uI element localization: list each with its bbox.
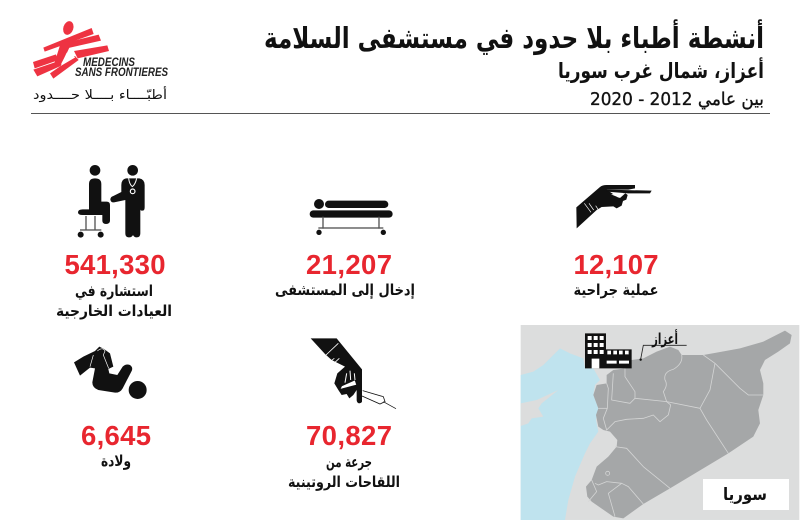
Syria territory bbox=[586, 331, 792, 518]
map label box bbox=[703, 479, 789, 510]
number: 21,207 bbox=[306, 249, 392, 280]
stat: births bbox=[74, 347, 151, 470]
logo Arabic name: أطبّــــاء بــــلا حــــدود bbox=[33, 86, 167, 103]
number: 12,107 bbox=[574, 249, 658, 280]
logo wordmark: SANS FRONTIERES bbox=[75, 65, 168, 79]
label bbox=[56, 282, 172, 320]
label: العيادات الخارجية bbox=[56, 302, 172, 320]
number: 70,827 bbox=[306, 420, 392, 451]
governorate borders bbox=[588, 355, 763, 517]
stat: admissions bbox=[275, 199, 415, 299]
label: عملية جراحية bbox=[574, 281, 658, 299]
number: 541,330 bbox=[64, 249, 166, 280]
map: Syria bbox=[521, 325, 799, 520]
label: استشارة في bbox=[75, 282, 153, 300]
logo wordmark bbox=[75, 55, 168, 79]
label: جرعة من bbox=[326, 453, 372, 471]
icon: hand with syringe bbox=[311, 338, 396, 409]
label bbox=[288, 453, 400, 491]
label: إدخال إلى المستشفى bbox=[275, 281, 415, 299]
number: 6,645 bbox=[81, 420, 151, 451]
logo wordmark: MEDECINS bbox=[83, 55, 135, 69]
icon: newborn held by hand bbox=[74, 347, 147, 399]
icon: hand with scalpel bbox=[576, 185, 652, 228]
callout: Azaz leader line bbox=[641, 345, 687, 359]
icon: running man bbox=[33, 20, 109, 79]
title block bbox=[264, 19, 764, 110]
icon: hospital building bbox=[585, 333, 632, 368]
map background bbox=[521, 325, 799, 520]
label: ولادة bbox=[101, 452, 131, 470]
stat: surgery bbox=[574, 185, 658, 299]
icon: doctor and patient bbox=[78, 165, 145, 238]
callout: Azaz label: أعزاز bbox=[651, 329, 678, 348]
logo: MSF bbox=[33, 20, 168, 103]
date range: بين عامي 2012 - 2020 bbox=[590, 89, 764, 110]
stat: outpatient consultations bbox=[56, 165, 172, 320]
map label box: سوريا bbox=[723, 485, 767, 505]
divider bbox=[31, 113, 770, 114]
icon: hospital bed bbox=[310, 199, 393, 235]
stat: vaccinations bbox=[288, 338, 400, 491]
Cyprus bbox=[521, 390, 558, 426]
sea bbox=[521, 348, 600, 520]
label: اللقاحات الروتينية bbox=[288, 473, 400, 491]
